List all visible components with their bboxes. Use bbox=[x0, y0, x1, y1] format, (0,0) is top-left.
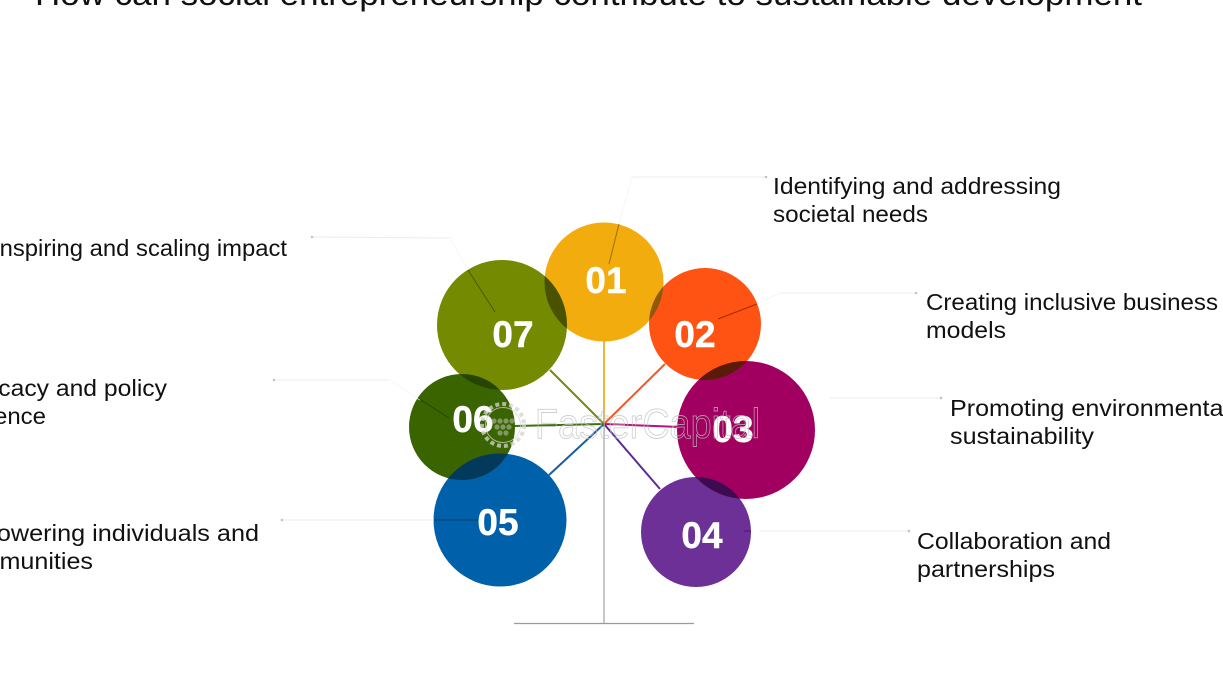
number 05: 05 bbox=[477, 502, 519, 543]
tree trunk and base bbox=[514, 424, 694, 624]
circle 02 bbox=[649, 268, 761, 380]
leader lines bbox=[273, 176, 942, 532]
branch lines bbox=[514, 340, 680, 489]
label 04: Collaboration and bbox=[917, 528, 1111, 554]
circle 06 bbox=[409, 374, 515, 480]
circle 04 bbox=[641, 477, 751, 587]
label 05 bbox=[0, 520, 259, 574]
label 01: societal needs bbox=[773, 201, 928, 227]
label 03 bbox=[950, 395, 1223, 449]
circle overlaps bbox=[448, 276, 747, 499]
label 02 bbox=[926, 289, 1218, 343]
number 02: 02 bbox=[674, 314, 716, 355]
number 01: 01 bbox=[585, 260, 627, 301]
label 03: sustainability bbox=[950, 423, 1095, 449]
circle 05 bbox=[434, 454, 566, 586]
label 04 bbox=[917, 528, 1111, 582]
circle 01 bbox=[544, 222, 664, 342]
circle 07 bbox=[437, 260, 567, 390]
label 04: partnerships bbox=[917, 556, 1055, 582]
label 07: Inspiring and scaling impact bbox=[0, 235, 288, 261]
watermark: FasterCapital bbox=[535, 400, 760, 447]
label 02: Creating inclusive business bbox=[926, 289, 1218, 315]
number 04: 04 bbox=[681, 515, 723, 556]
number 07: 07 bbox=[492, 314, 534, 355]
label 03: Promoting environmental bbox=[950, 395, 1223, 421]
label 06 bbox=[0, 375, 168, 429]
number 06: 06 bbox=[452, 399, 494, 440]
circle 03 bbox=[677, 361, 815, 499]
label 02: models bbox=[926, 317, 1006, 343]
label 01: Identifying and addressing bbox=[773, 173, 1061, 199]
label 01 bbox=[773, 173, 1061, 227]
number 03: 03 bbox=[712, 409, 754, 450]
